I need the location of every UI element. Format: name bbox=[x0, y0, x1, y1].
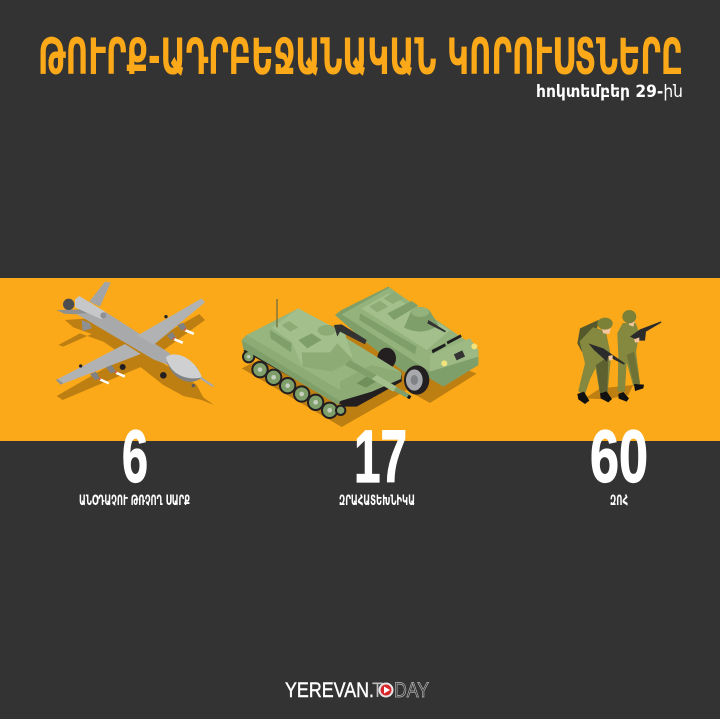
tank road wheels bbox=[243, 351, 345, 418]
icon: drone bbox=[56, 282, 214, 405]
nose bbox=[167, 362, 202, 382]
lower fin bbox=[82, 320, 92, 331]
APC body bbox=[335, 287, 478, 387]
soldier left bbox=[577, 318, 625, 404]
rear stabiliser bbox=[57, 309, 89, 315]
stat: casualties bbox=[590, 415, 648, 509]
panel: orange band bbox=[0, 278, 720, 441]
label: casualties: ԶՈՀ bbox=[610, 493, 628, 509]
stat: drones bbox=[79, 415, 190, 509]
logo DAY: DAY bbox=[394, 679, 429, 702]
subtitle: date: հոկտեմբեր 29-ին bbox=[536, 82, 683, 101]
tank bbox=[242, 299, 412, 418]
fuselage bbox=[77, 312, 170, 365]
machine gun bbox=[334, 324, 367, 344]
tank hull side bbox=[242, 340, 342, 405]
APC lights and windows bbox=[432, 343, 446, 353]
APC hatches bbox=[369, 301, 388, 312]
landing gear bbox=[79, 315, 168, 379]
APC wheels bbox=[404, 365, 429, 395]
left wing bbox=[56, 344, 141, 385]
APC bbox=[335, 287, 478, 395]
backpack bbox=[577, 320, 598, 352]
label: armoured vehicles: ԶՐԱՀԱՏԵԽՆԻԿԱ bbox=[339, 493, 415, 509]
tail fin bbox=[89, 282, 111, 307]
tank antenna bbox=[276, 299, 278, 327]
drone shadow bbox=[57, 314, 214, 405]
engine bbox=[75, 296, 105, 319]
logo play button bbox=[378, 682, 394, 698]
soldier right bbox=[618, 310, 661, 402]
missiles bbox=[90, 323, 194, 384]
stat: armoured vehicles bbox=[339, 415, 415, 509]
number 17: 17 bbox=[354, 415, 407, 498]
tank gun bbox=[345, 360, 412, 399]
number 60: 60 bbox=[590, 415, 648, 498]
logo: Yerevan.Today bbox=[285, 679, 429, 702]
tank hull top bbox=[242, 308, 402, 401]
right wing bbox=[137, 298, 205, 345]
logo wordmark: YEREVAN. bbox=[285, 679, 374, 702]
tank turret bbox=[272, 308, 353, 372]
vehicle shadows bbox=[242, 325, 477, 427]
label: drones: ԱՆՕԴԱՉՈՒ ԹՌՉՈՂ ՍԱՐՔ bbox=[79, 493, 190, 509]
number 6: 6 bbox=[122, 415, 148, 498]
icon: armoured vehicles bbox=[242, 287, 478, 427]
tank tracks bbox=[243, 343, 402, 407]
logo T: T bbox=[372, 679, 383, 702]
icon: soldiers bbox=[577, 310, 661, 404]
ground shadow bbox=[585, 385, 633, 399]
APC turret bbox=[404, 307, 438, 332]
